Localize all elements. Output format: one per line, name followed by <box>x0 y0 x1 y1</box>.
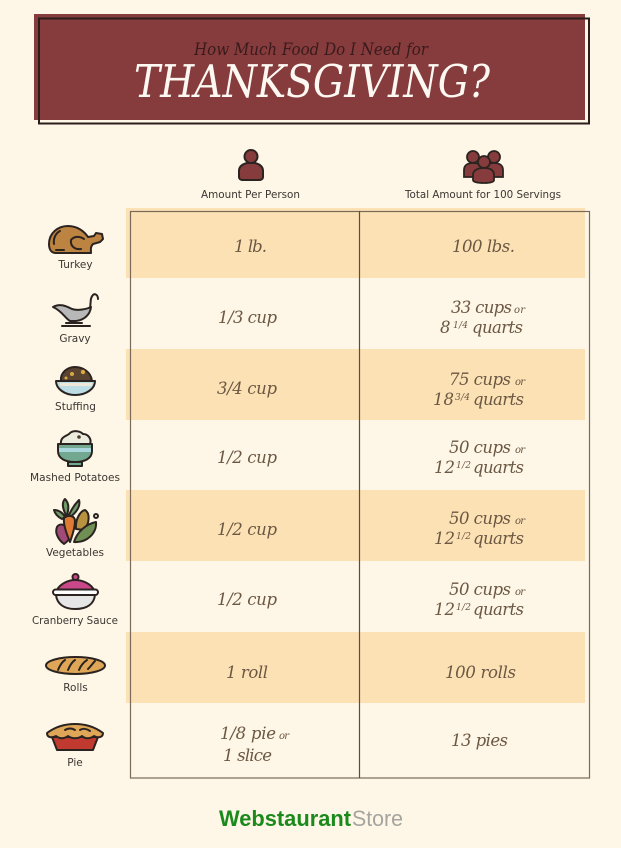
row: gravy: 8 <box>440 318 450 337</box>
row: mashed potatoes: 50 cups <box>449 438 511 457</box>
icon: mashed potatoes bowl <box>58 431 92 466</box>
title banner <box>34 14 589 124</box>
row: rolls: 100 rolls <box>445 663 516 682</box>
row: cranberry sauce: Cranberry Sauce <box>32 615 118 627</box>
column header: total amount: Total Amount for 100 Servings <box>404 189 561 201</box>
row: gravy <box>53 294 526 345</box>
row: turkey: 100 lbs. <box>452 237 515 256</box>
row: mashed potatoes <box>30 431 526 484</box>
row: cranberry sauce: or <box>515 587 526 598</box>
row: pie: 13 pies <box>451 731 508 750</box>
row: gravy: 1/3 cup <box>218 308 277 327</box>
row: mashed potatoes: or <box>515 445 526 456</box>
row: stuffing: Stuffing <box>55 401 96 413</box>
row: stuffing: 18 <box>433 390 454 409</box>
row: mashed potatoes: 12 <box>434 458 455 477</box>
row: gravy: 1/4 <box>453 321 468 331</box>
row: rolls <box>46 657 516 694</box>
table <box>126 208 590 778</box>
row: stuffing <box>55 367 526 413</box>
row: gravy: Gravy <box>59 333 91 345</box>
row: cranberry sauce: 50 cups <box>449 580 511 599</box>
row: gravy: 33 cups <box>451 298 512 317</box>
row: pie: 1 slice <box>223 746 272 765</box>
row: stuffing: 3/4 <box>455 393 470 403</box>
row: cranberry sauce: quarts <box>473 600 524 619</box>
row: rolls: Rolls <box>63 682 88 694</box>
column header: amount per person <box>201 150 300 201</box>
row: mashed potatoes: 1/2 cup <box>217 448 277 467</box>
row: cranberry sauce: 12 <box>434 600 455 619</box>
column header: amount per person: Amount Per Person <box>201 189 300 201</box>
row: vegetables: quarts <box>473 529 524 548</box>
row: vegetables: 12 <box>434 529 455 548</box>
icon: vegetables <box>54 499 98 544</box>
icon: covered cranberry dish <box>53 574 98 609</box>
subtitle: How Much Food Do I Need for <box>193 40 429 59</box>
icon: group of people <box>464 151 503 183</box>
icon: gravy boat <box>53 294 98 326</box>
row: stuffing: or <box>515 377 526 388</box>
row: pie: Pie <box>67 757 83 769</box>
row: turkey: Turkey <box>57 259 93 271</box>
logo: Store <box>352 806 403 831</box>
row: mashed potatoes: quarts <box>473 458 524 477</box>
row: turkey: 1 lb. <box>234 237 267 256</box>
row: stuffing: quarts <box>473 390 524 409</box>
row: pie <box>47 724 508 769</box>
icon: turkey <box>49 226 103 253</box>
row: rolls: 1 roll <box>226 663 268 682</box>
row: vegetables: 1/2 <box>456 532 471 542</box>
row: cranberry sauce <box>32 574 526 627</box>
row: pie: 1/8 pie <box>220 724 276 743</box>
row: vegetables: 1/2 cup <box>217 520 277 539</box>
row: vegetables: Vegetables <box>46 547 104 559</box>
row: mashed potatoes: 1/2 <box>456 461 471 471</box>
row: stuffing: 75 cups <box>449 370 511 389</box>
row: cranberry sauce: 1/2 <box>456 603 471 613</box>
row: turkey <box>49 226 515 271</box>
row: vegetables <box>46 499 526 559</box>
icon: bread roll <box>46 657 105 674</box>
icon: pie <box>47 724 103 750</box>
row: gravy: or <box>514 305 526 316</box>
row: vegetables: 50 cups <box>449 509 511 528</box>
main title: THANKSGIVING? <box>134 55 491 108</box>
row: stuffing: 3/4 cup <box>217 379 277 398</box>
icon: stuffing bowl <box>56 367 95 395</box>
row: gravy: quarts <box>472 318 523 337</box>
row: pie: or <box>279 731 290 742</box>
column header: total amount <box>404 151 561 201</box>
logo: Webstaurant <box>219 806 352 831</box>
row: cranberry sauce: 1/2 cup <box>217 590 277 609</box>
row: vegetables: or <box>515 516 526 527</box>
row: mashed potatoes: Mashed Potatoes <box>30 472 120 484</box>
icon: person <box>239 150 263 180</box>
